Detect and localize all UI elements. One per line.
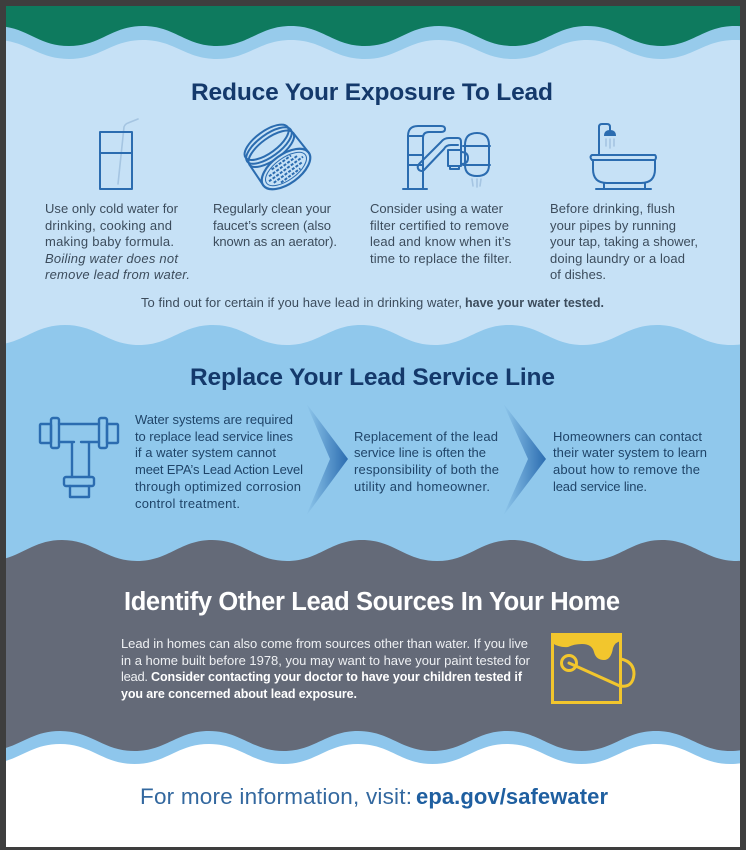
- text: homeowners: their water system to learn: [553, 445, 707, 460]
- text: water filter: filter certified to remove: [370, 218, 509, 233]
- text: cold water: Boiling water does not: [45, 251, 179, 266]
- text: water filter: lead and know when it’s: [370, 234, 512, 249]
- text: homeowners: lead service line.: [553, 479, 647, 494]
- text: water systems: to replace lead service lines: [135, 429, 294, 444]
- panel: reduce your exposure: [45, 79, 698, 310]
- text: water filter: Consider using a water: [370, 201, 504, 216]
- text: water systems: control treatment.: [135, 496, 240, 511]
- text: water systems: Water systems are required: [135, 412, 293, 427]
- text: replacement responsibility: [354, 429, 499, 494]
- arrow: first chevron: [306, 403, 348, 516]
- text: flush pipes: of dishes.: [550, 267, 606, 282]
- heading: reduce exposure: Reduce Your Exposure To Lead: [191, 79, 553, 106]
- text: homeowners: Homeowners can contact: [553, 429, 702, 444]
- icon: faucet aerator: [237, 117, 317, 197]
- text: cold water: remove lead from water.: [45, 267, 190, 282]
- text: paint and doctor advice: you are concerned about lead exposure.: [121, 687, 357, 701]
- text: water systems: [135, 412, 303, 511]
- text: flush pipes: [550, 201, 698, 282]
- text: flush pipes: Before drinking, flush: [550, 201, 675, 216]
- icon: bathtub with shower: [590, 124, 656, 189]
- footer: more information link: epa.gov/safewater: [416, 784, 608, 809]
- heading: other lead sources: Identify Other Lead Sources In Your Home: [124, 588, 620, 616]
- text: aerator: Regularly clean your: [213, 201, 332, 216]
- text: test your water: [141, 295, 604, 310]
- panel: replace service line: [40, 364, 707, 516]
- text: cold water: Use only cold water for: [45, 201, 179, 216]
- text: water systems: if a water system cannot: [135, 445, 276, 460]
- text: replacement responsibility: utility and homeowner.: [354, 479, 490, 494]
- text: cold water: drinking, cooking and: [45, 218, 172, 233]
- text: water filter: time to replace the filter.: [370, 251, 512, 266]
- text: homeowners: [553, 429, 707, 494]
- text: paint and doctor advice: [121, 636, 531, 701]
- footer: more information link: For more information, visit:: [140, 784, 412, 809]
- text: cold water: [45, 201, 190, 282]
- text: paint and doctor advice: Lead in homes can also come from sources other than water. If you live: [121, 636, 528, 651]
- icon: glass of water: [100, 119, 138, 189]
- text: cold water: making baby formula.: [45, 234, 174, 249]
- arrow: second chevron: [503, 403, 546, 516]
- text: flush pipes: your pipes by running: [550, 218, 676, 233]
- text: replacement responsibility: Replacement of the lead: [354, 429, 498, 444]
- text: water systems: meet EPA’s Lead Action Level: [135, 462, 303, 477]
- text: paint and doctor advice: Consider contacting your doctor to have your children tested if: [151, 670, 523, 684]
- text: aerator: faucet’s screen (also: [213, 218, 331, 233]
- text: homeowners: about how to remove the: [553, 462, 700, 477]
- icon: paint can: [552, 634, 634, 702]
- text: flush pipes: doing laundry or a load: [550, 251, 685, 266]
- text: replacement responsibility: service line is often the: [354, 445, 486, 460]
- text: aerator: [213, 201, 337, 249]
- heading: replace service line: Replace Your Lead Service Line: [190, 364, 555, 391]
- text: test your water: have your water tested.: [465, 296, 604, 310]
- text: flush pipes: your tap, taking a shower,: [550, 234, 698, 249]
- text: water systems: through optimized corrosion: [135, 479, 301, 494]
- text: paint and doctor advice: lead.: [121, 669, 148, 684]
- text: paint and doctor advice: in a home built before 1978, you may want to have your paint tested for: [121, 653, 531, 668]
- icon: pipe fitting: [40, 418, 118, 497]
- text: test your water: To find out for certain if you have lead in drinking water,: [141, 295, 462, 310]
- icon: faucet with water filter: [403, 126, 490, 189]
- footer: more information link: [140, 784, 608, 809]
- text: aerator: known as an aerator).: [213, 234, 337, 249]
- panel: other lead sources: [121, 588, 634, 702]
- text: water filter: [370, 201, 512, 266]
- text: replacement responsibility: responsibility of both the: [354, 462, 499, 477]
